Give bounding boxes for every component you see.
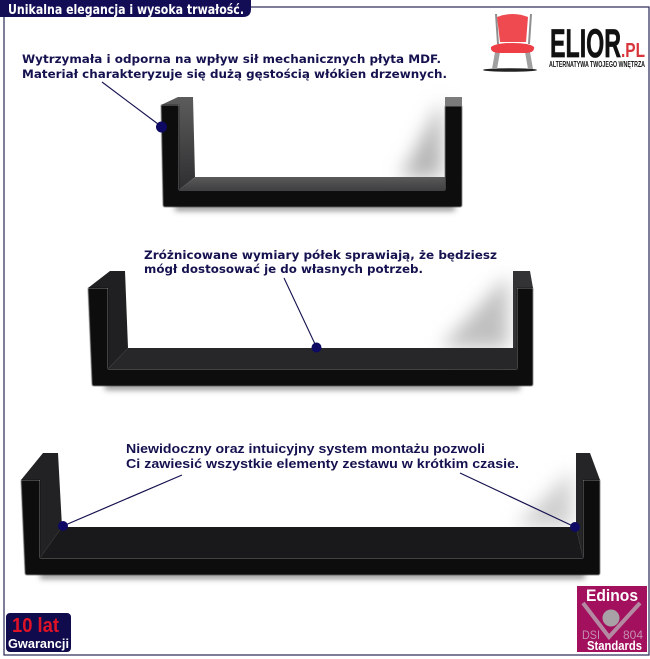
- badge: Edinos standards: Standards: [587, 639, 642, 653]
- badge: Edinos standards: Edinos: [586, 586, 638, 605]
- callout: mounting pointer left: [58, 475, 182, 531]
- badge: 10 years warranty: [6, 613, 71, 652]
- logo: Elior: [483, 14, 645, 72]
- text block: mounting: Ci zawiesić wszystkie elementy zestawu w krótkim czasie.: [126, 456, 519, 471]
- callout: material pointer: [102, 82, 167, 132]
- callout: dimensions pointer: [284, 278, 322, 352]
- text block: material: Materiał charakteryzuje się dużą gęstością włókien drzewnych.: [22, 67, 447, 81]
- text block: material: [22, 52, 447, 81]
- shelf 1: [161, 97, 462, 211]
- text block: dimensions: mógł dostosować je do własnych potrzeb.: [144, 262, 423, 276]
- callout: mounting pointer right: [460, 473, 580, 532]
- text block: material: Wytrzymała i odporna na wpływ sił mechanicznych płyta MDF.: [22, 52, 441, 66]
- badge: Edinos standards: [577, 586, 647, 653]
- badge: 10 years warranty: Gwarancji: [8, 636, 69, 651]
- text block: dimensions: Zróżnicowane wymiary półek sprawiają, że będziesz: [144, 248, 497, 262]
- text block: mounting: [126, 441, 519, 471]
- badge: Edinos standards: DSI: [582, 628, 600, 642]
- shelf 2: [88, 271, 533, 390]
- text block: dimensions: [144, 248, 497, 276]
- shelf 3: [21, 453, 600, 579]
- header banner: Unikalna elegancja i wysoka trwałość.: [8, 3, 244, 18]
- badge: Edinos standards: 804: [623, 628, 643, 642]
- badge: 10 years warranty: 10 lat: [12, 615, 59, 637]
- text block: mounting: Niewidoczny oraz intuicyjny system montażu pozwoli: [126, 441, 485, 456]
- icon: red chair: [483, 14, 537, 72]
